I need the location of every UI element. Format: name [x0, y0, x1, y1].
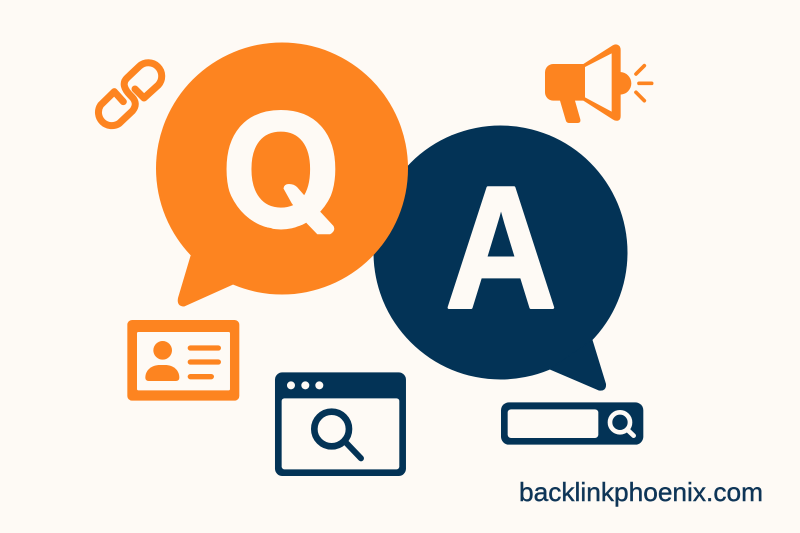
icon: chain link: [98, 63, 162, 126]
answer speech bubble: [374, 126, 628, 390]
icon: browser window with magnifier: [275, 372, 406, 476]
letter Q: Q: [222, 78, 340, 261]
letter Q: [226, 110, 336, 234]
infographic canvas: [94, 42, 762, 507]
icon: search bar: [501, 402, 643, 445]
letter A: A: [445, 150, 557, 344]
website label: backlinkphoenix.com: [519, 477, 763, 507]
icon: megaphone: [545, 44, 652, 123]
question speech bubble: [156, 42, 408, 306]
icon: ID card: [127, 320, 239, 401]
